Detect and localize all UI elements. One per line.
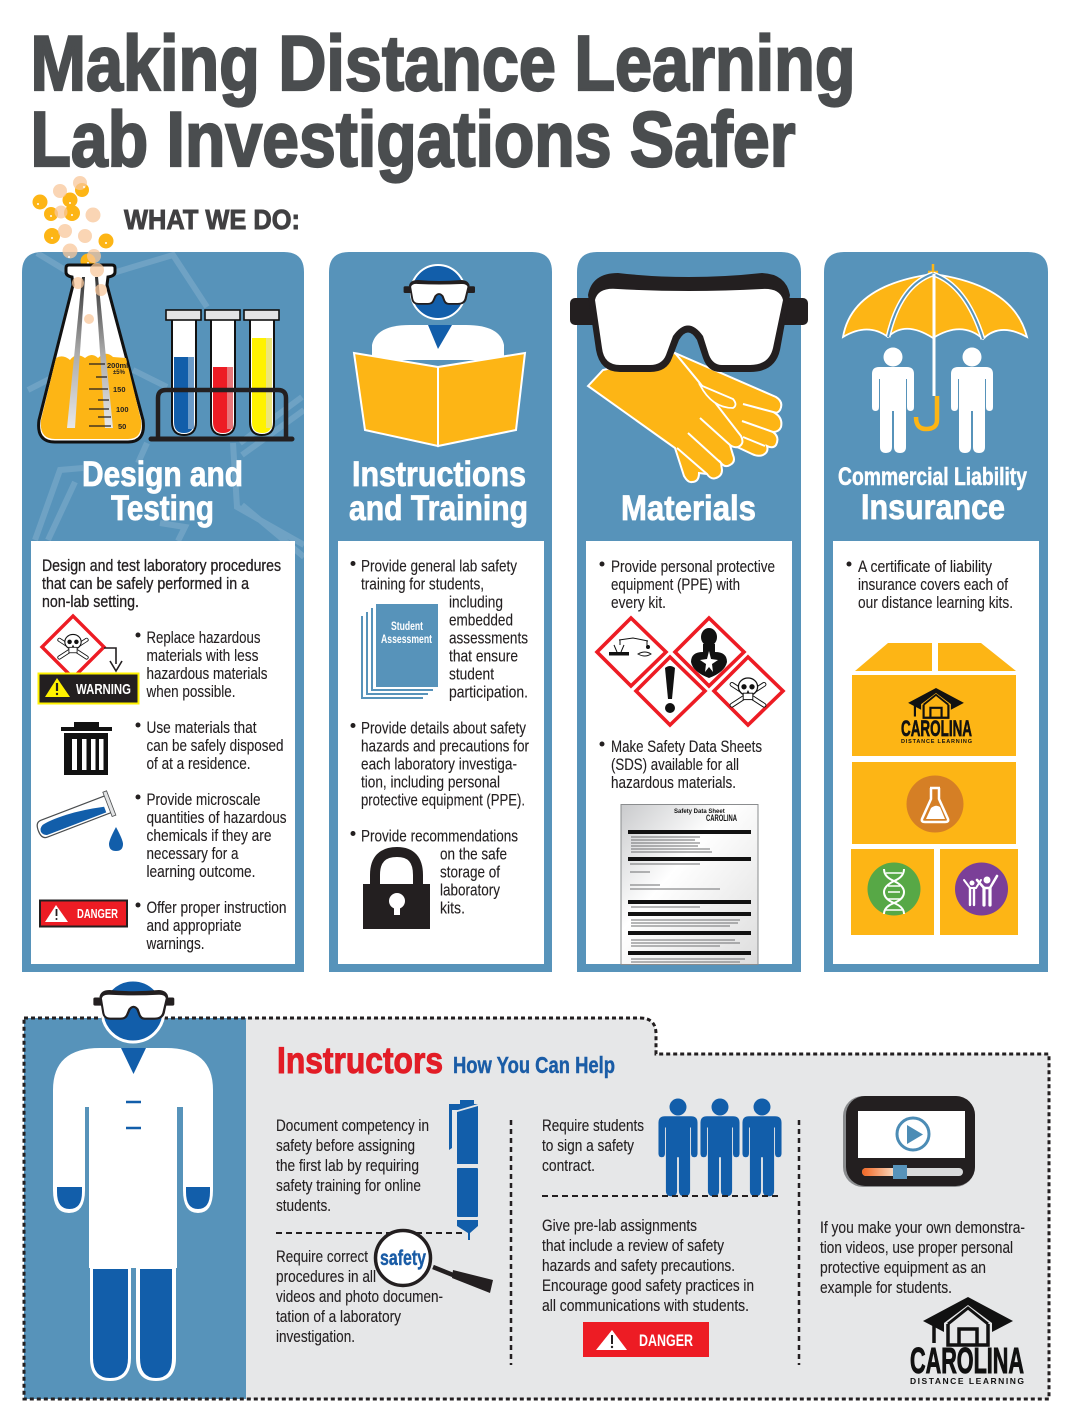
text panel: insurance (833, 541, 1039, 964)
logo: carolina distance learning (910, 1297, 1024, 1386)
text: pre-lab assignments: that include a review of safety (542, 1237, 725, 1255)
bullet list: protective equipment (PPE). (361, 792, 525, 810)
text: document competency: students. (276, 1197, 331, 1215)
icon: umbrella (843, 264, 1027, 429)
bullet list (136, 629, 286, 953)
text: demonstration videos: example for students. (820, 1279, 952, 1297)
panel: design and testing (22, 176, 304, 972)
icon: danger label (40, 900, 127, 926)
bullet list (350, 558, 529, 918)
intro text: Design and test laboratory procedures (42, 557, 281, 575)
icon: health hazard (691, 628, 727, 678)
text: document competency: Document competency in (276, 1117, 429, 1135)
bullet text: our distance learning kits. (858, 594, 1013, 612)
text: document competency: safety before assigning (276, 1137, 415, 1155)
text: pre-lab assignments: all communications with students. (542, 1297, 749, 1315)
bullet text: insurance covers each of (858, 576, 1008, 594)
bullet list: kits. (440, 900, 465, 918)
icon: warning label: WARNING (76, 681, 131, 698)
bullet list: assessments (449, 630, 528, 648)
bullet text: sds: Make Safety Data Sheets (611, 738, 762, 756)
logo on box (901, 688, 972, 745)
icon: corrosion (609, 638, 651, 656)
divider dashes (798, 1120, 800, 1365)
bullet list: participation. (449, 684, 528, 702)
bullet list: hazards and precautions for (361, 738, 529, 756)
icon: skull (732, 678, 764, 705)
bullet text: ppe (600, 558, 775, 612)
title (30, 19, 856, 183)
logo on box: DISTANCE LEARNING (901, 739, 972, 745)
bullet list: each laboratory investiga- (361, 756, 517, 774)
bullet list: chemicals if they are (146, 827, 272, 845)
icon: tilted tube and drop (34, 791, 123, 851)
text: require correct procedures: tation of a laboratory (276, 1308, 402, 1326)
icon: trash can (61, 722, 112, 775)
bullet text: sds: hazardous materials. (611, 774, 736, 792)
icon: dna circle (868, 862, 920, 916)
icon: pen (449, 1100, 478, 1240)
bullet text: A certificate of liability (858, 558, 993, 576)
panel: instructions and training (329, 252, 552, 972)
divider dashes (510, 1120, 512, 1365)
icon: video player (843, 1096, 975, 1187)
text: require correct procedures: investigation. (276, 1328, 355, 1346)
bullet text: ppe: every kit. (611, 594, 666, 612)
bullet list: student (449, 666, 494, 684)
bullet list: can be safely disposed (146, 737, 284, 755)
heading: instructors how you can help: Instructors (277, 1040, 443, 1081)
bullet list: warnings. (146, 935, 204, 953)
icon: person reading book (354, 265, 525, 446)
icon: ghs hazard diamonds (597, 618, 783, 725)
bullet list: Offer proper instruction (146, 899, 286, 917)
text: demonstration videos (820, 1219, 1025, 1297)
bullet list: training for students, (361, 576, 484, 594)
text: require students: to sign a safety (542, 1137, 635, 1155)
panel: instructors (24, 980, 1049, 1399)
icon: padlock (363, 852, 430, 929)
title: Lab Investigations Safer (30, 95, 796, 183)
bullet list: that ensure (449, 648, 518, 666)
heading: design and testing: Design and (82, 455, 243, 494)
logo on box: CAROLINA (901, 716, 972, 741)
icon: flask: ±5% (113, 370, 126, 376)
bullet list: on the safe (440, 846, 507, 864)
heading: instructions and training: and Training (349, 489, 528, 528)
bullet list: of at a residence. (146, 755, 250, 773)
bullet list: when possible. (146, 683, 236, 701)
icon: flask: 200ml (107, 361, 128, 370)
text: require correct procedures: videos and photo documen- (276, 1288, 443, 1306)
safety data sheet document (621, 804, 758, 964)
text: require students: contract. (542, 1157, 595, 1175)
heading: instructions and training (349, 455, 528, 528)
heading: commercial liability insurance (838, 463, 1027, 527)
text: demonstration videos: If you make your own demonstra- (820, 1219, 1025, 1237)
logo: carolina distance learning: DISTANCE LEARNING (910, 1376, 1024, 1386)
icon: family circle (955, 862, 1008, 916)
bullet text (846, 558, 1013, 612)
bullet list: and appropriate (146, 917, 242, 935)
bullet list: hazardous materials (146, 665, 268, 683)
icon: flask circle (906, 776, 964, 832)
text: pre-lab assignments: Encourage good safety practices in (542, 1277, 754, 1295)
text: document competency: safety training for online (276, 1177, 421, 1195)
safety data sheet document: CAROLINA (706, 813, 737, 823)
icon: magnifying glass with safety: safety (380, 1247, 426, 1270)
bullet list: including (449, 594, 503, 612)
icon: flask: 150 (113, 385, 126, 394)
divider dashes (542, 1195, 782, 1197)
intro text (42, 557, 281, 611)
icon: arrow (104, 648, 122, 671)
bullet list: laboratory (440, 882, 501, 900)
figure: lab coat person (53, 980, 213, 1381)
heading: materials: Materials (621, 489, 756, 528)
heading: instructors how you can help (277, 1040, 615, 1081)
divider dashes (276, 1232, 462, 1234)
bullet list: quantities of hazardous (146, 809, 286, 827)
icon: three students (658, 1098, 782, 1196)
bullet text: ppe: equipment (PPE) with (611, 576, 740, 594)
icon: skull hazard diamond (42, 616, 104, 678)
text: pre-lab assignments: Give pre-lab assignments (542, 1217, 697, 1235)
icon: goggles (570, 273, 808, 372)
bullet list: Provide details about safety (361, 720, 527, 738)
icon: gloves (588, 353, 781, 482)
icon: flask: 100 (116, 405, 129, 414)
bullet list: tion, including personal (361, 774, 500, 792)
bullet list: materials with less (146, 647, 258, 665)
heading: instructions and training: Instructions (352, 455, 526, 494)
icon: kit box (851, 643, 1018, 935)
title: Making Distance Learning (30, 19, 856, 107)
heading: instructors how you can help: How You Can Help (453, 1052, 615, 1078)
heading: design and testing (82, 455, 243, 528)
icon: test tubes in rack (151, 310, 292, 439)
icon: bubbles (32, 176, 114, 268)
bullet list: learning outcome. (146, 863, 256, 881)
bullet list: necessary for a (146, 845, 239, 863)
bullet list: Provide microscale (146, 791, 260, 809)
text panel: design and testing (31, 541, 295, 964)
text: require students: Require students (542, 1117, 644, 1135)
bullet text: ppe: Provide personal protective (611, 558, 775, 576)
heading: what we do: WHAT WE DO: (124, 204, 300, 235)
bullet list: storage of (440, 864, 500, 882)
bullet list: Provide recommendations (361, 828, 518, 846)
heading: commercial liability insurance: Insurance (861, 488, 1005, 527)
icon: flask: 50 (118, 422, 126, 431)
icon: student assessment booklets: Student (391, 619, 423, 633)
bullet text: sds: (SDS) available for all (611, 756, 739, 774)
text: document competency (276, 1117, 429, 1215)
text: require correct procedures: Require correct (276, 1248, 368, 1266)
icon: danger banner (583, 1322, 709, 1357)
bullet list: Provide general lab safety (361, 558, 518, 576)
bullet list: Replace hazardous (146, 629, 260, 647)
text: demonstration videos: protective equipment as an (820, 1259, 986, 1277)
icon: student assessment booklets: Assessment (381, 632, 432, 646)
icon: danger label: DANGER (77, 906, 118, 921)
text panel: materials (586, 541, 792, 964)
text: document competency: the first lab by requiring (276, 1157, 419, 1175)
text: require students (542, 1117, 644, 1175)
bullet text: sds (600, 738, 762, 792)
panel: commercial liability insurance (824, 252, 1048, 972)
intro text: that can be safely performed in a (42, 575, 250, 593)
text panel: instructions (338, 541, 544, 964)
icon: magnifying glass with safety (376, 1230, 493, 1293)
icon: danger banner: DANGER (639, 1331, 693, 1350)
bullet list: embedded (449, 612, 513, 630)
panel: materials (570, 252, 808, 972)
text: require correct procedures: procedures in all (276, 1268, 376, 1286)
icon: student assessment booklets (361, 604, 438, 699)
icon: exclamation (665, 666, 675, 713)
icon: flask (39, 263, 143, 442)
text: pre-lab assignments: hazards and safety precautions. (542, 1257, 735, 1275)
text: require correct procedures (276, 1248, 443, 1346)
text: pre-lab assignments (542, 1217, 754, 1315)
icon: two people (872, 348, 993, 453)
icon: warning label (38, 674, 138, 704)
safety data sheet document: Safety Data Sheet (674, 809, 725, 815)
heading: design and testing: Testing (111, 489, 214, 528)
text: demonstration videos: tion videos, use proper personal (820, 1239, 1013, 1257)
bullet list: Use materials that (146, 719, 257, 737)
intro text: non-lab setting. (42, 593, 139, 611)
